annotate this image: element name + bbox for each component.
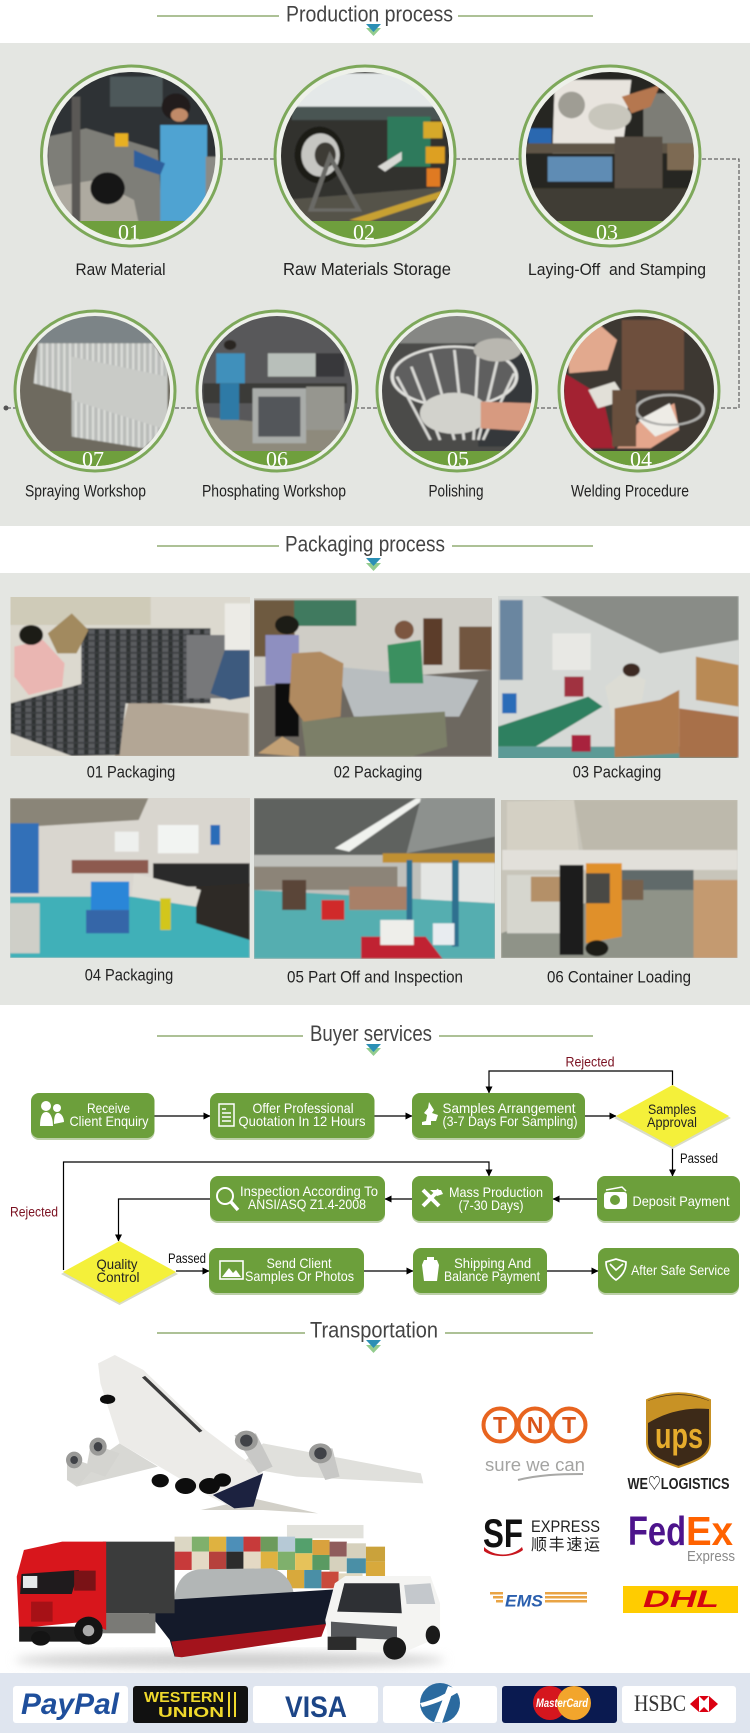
step: samples arrangement <box>412 1093 585 1140</box>
heading: packaging process: Packaging process <box>285 532 445 556</box>
labels: packaging row 2: 04 Packaging <box>85 966 173 984</box>
heading: buyer services <box>157 1021 593 1056</box>
step: receive client enquiry <box>31 1093 154 1140</box>
photo: packaging 05 <box>251 797 497 960</box>
step 07: spraying workshop: 07 <box>82 446 104 472</box>
logo: SF Express: 顺丰速运 <box>531 1536 600 1554</box>
logo: EMS: EMS <box>505 1592 544 1610</box>
decision: quality control <box>61 1241 178 1305</box>
logo: TNT: N <box>527 1412 543 1438</box>
logo: TNT: T <box>562 1412 576 1438</box>
heading: packaging process <box>157 532 593 571</box>
step 02: raw materials storage: 02 <box>353 220 375 244</box>
labels: packaging row 1: 02 Packaging <box>334 764 422 782</box>
photo: packaging 03 <box>495 595 741 760</box>
labels: packaging row 1: 01 Packaging <box>87 764 175 782</box>
heading: transportation: Transportation <box>310 1318 438 1342</box>
flowchart connectors <box>64 1071 672 1271</box>
step: offer professional quotation: Quotation In 12 Hours <box>238 1113 366 1129</box>
step: mass production: (7-30 Days) <box>458 1197 524 1213</box>
step: mass production <box>412 1176 553 1223</box>
card: VISA <box>253 1686 378 1724</box>
step 05: polishing <box>377 310 540 473</box>
step: receive client enquiry: Client Enquiry <box>70 1113 148 1129</box>
logo: SF Express <box>483 1512 600 1556</box>
logo: TNT <box>484 1408 586 1480</box>
decision: quality control: Control <box>96 1269 140 1285</box>
connector: dashed process path <box>4 159 739 410</box>
labels: production steps: Phosphating Workshop <box>202 482 346 500</box>
logo: DHL <box>623 1586 738 1613</box>
logo: FedEx <box>628 1508 735 1565</box>
logo: FedEx: Ex <box>686 1508 733 1554</box>
logo: UPS <box>628 1393 730 1493</box>
photo: packaging 02 <box>251 597 495 760</box>
step 01: raw material: 01 <box>118 220 140 244</box>
heading: production process <box>157 2 593 36</box>
labels: packaging row 1 <box>87 764 661 782</box>
step: offer professional quotation: Offer Professional <box>252 1100 354 1116</box>
panel: packaging process background <box>0 573 750 1005</box>
card: Western Union: WESTERN <box>144 1689 224 1706</box>
step: samples arrangement: (3-7 Days For Sampling) <box>442 1113 578 1129</box>
logo: SF Express: EXPRESS <box>531 1517 600 1536</box>
step: after safe service: After Safe Service <box>631 1262 730 1278</box>
step: receive client enquiry: Receive <box>87 1100 130 1116</box>
payment strip background <box>0 1673 750 1733</box>
photo: packaging 01 <box>7 595 253 758</box>
decision: samples approval <box>614 1085 731 1149</box>
decision: samples approval: Samples <box>648 1101 696 1117</box>
card: VISA: VISA <box>285 1691 347 1724</box>
logo: TNT: sure we can <box>485 1455 585 1475</box>
card: PayPal: PayPal <box>21 1688 120 1721</box>
illustration: ground shadow <box>15 1652 445 1668</box>
step 02: raw materials storage <box>273 66 455 246</box>
illustration: container ship <box>139 1525 385 1657</box>
labels: production steps: Polishing <box>428 482 484 500</box>
labels: production steps: Laying-Off and Stamping <box>528 261 706 279</box>
card: HSBC: HSBC <box>634 1691 686 1716</box>
step 01: raw material <box>42 66 225 246</box>
labels: production steps: Raw Materials Storage <box>283 259 451 279</box>
labels: production steps <box>25 259 706 500</box>
step: shipping and balance <box>413 1248 547 1295</box>
step 06: phosphating workshop <box>196 310 359 473</box>
step 07: spraying workshop <box>14 310 177 473</box>
step: samples arrangement: Samples Arrangement <box>442 1100 576 1116</box>
labels: packaging row 2: 05 Part Off and Inspection <box>287 968 463 986</box>
step: send client samples: Samples Or Photos <box>245 1268 354 1284</box>
step: inspection <box>210 1176 385 1223</box>
logo: FedEx: Express <box>687 1548 735 1565</box>
logo: EMS <box>490 1591 587 1610</box>
photo: packaging 06 <box>497 798 741 962</box>
step: send client samples <box>209 1248 364 1295</box>
labels: packaging row 2: 06 Container Loading <box>547 968 691 986</box>
heading: production process: Production process <box>286 2 453 26</box>
heading: buyer services: Buyer services <box>310 1021 432 1046</box>
illustration: van <box>325 1576 440 1660</box>
step: mass production: Mass Production <box>449 1184 543 1200</box>
labels: packaging row 2 <box>85 966 691 986</box>
card: HSBC <box>622 1686 736 1723</box>
step: inspection: Inspection According To <box>240 1183 378 1199</box>
step 04: welding procedure: 04 <box>630 446 652 472</box>
step: shipping and balance: Balance Payment <box>444 1268 540 1284</box>
heading: transportation <box>157 1318 593 1353</box>
illustration: truck <box>17 1542 175 1646</box>
step: after safe service <box>598 1248 739 1295</box>
logo: FedEx: Fed <box>628 1508 686 1554</box>
logo: TNT: T <box>493 1412 507 1438</box>
card: MasterCard <box>502 1686 617 1723</box>
step: offer professional quotation <box>210 1093 374 1140</box>
logo: DHL: DHL <box>643 1586 719 1613</box>
labels: production steps: Welding Procedure <box>571 482 689 500</box>
card: MasterCard: MasterCard <box>536 1698 589 1710</box>
step: inspection: ANSI/ASQ Z1.4-2008 <box>248 1196 366 1212</box>
flow labels: Passed <box>168 1251 206 1266</box>
step 05: polishing: 05 <box>447 446 469 472</box>
step: send client samples: Send Client <box>266 1255 332 1271</box>
flow labels: Passed <box>680 1151 718 1166</box>
flow labels <box>10 1054 718 1266</box>
labels: production steps: Raw Material <box>76 261 166 279</box>
flow labels: Rejected <box>566 1054 614 1070</box>
flow labels: Rejected <box>10 1204 58 1220</box>
step: deposit payment <box>597 1176 740 1223</box>
logo: SF Express: SF <box>483 1512 523 1556</box>
labels: production steps: Spraying Workshop <box>25 482 146 500</box>
logo: UPS: ups <box>655 1415 703 1456</box>
labels: packaging row 1: 03 Packaging <box>573 764 661 782</box>
photo: packaging 04 <box>7 797 253 960</box>
decision: quality control: Quality <box>96 1256 138 1272</box>
step 03: laying-off and stamping: 03 <box>596 220 618 244</box>
step: shipping and balance: Shipping And <box>454 1255 531 1271</box>
card: blue circular payment logo <box>383 1683 497 1723</box>
card: Western Union <box>133 1686 248 1723</box>
card: Western Union: UNION <box>158 1704 224 1721</box>
step 06: phosphating workshop: 06 <box>266 446 288 472</box>
illustration: airplane <box>66 1355 423 1513</box>
decision: samples approval: Approval <box>647 1114 697 1130</box>
step 04: welding procedure <box>557 310 722 473</box>
step: deposit payment: Deposit Payment <box>632 1193 730 1209</box>
step 03: laying-off and stamping <box>517 66 703 246</box>
panel: production process background <box>0 43 750 526</box>
